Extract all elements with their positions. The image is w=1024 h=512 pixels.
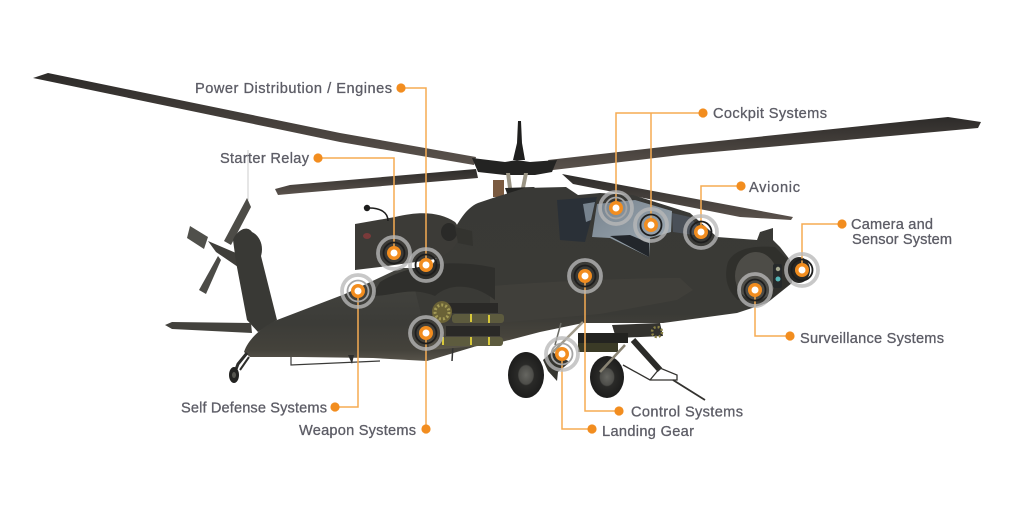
tail boom: [244, 268, 480, 361]
marker: power distribution: [410, 249, 442, 281]
nose recess: [726, 247, 790, 302]
label: power distribution / engines: Power Distribution / Engines: [195, 81, 392, 97]
marker: cockpit 2: [635, 209, 667, 241]
right main landing gear: [590, 340, 705, 400]
horizontal stabiliser: [165, 322, 252, 333]
label: control systems: Control Systems: [631, 404, 743, 420]
side sponson: [490, 278, 693, 322]
label: avionic: Avionic: [749, 180, 800, 196]
engine intake: [441, 223, 473, 246]
label: starter relay: Starter Relay: [220, 151, 310, 167]
main fuselage: [415, 187, 792, 350]
engine nacelle: [355, 213, 459, 270]
leader lines: [318, 88, 842, 429]
label: cockpit systems: Cockpit Systems: [713, 106, 827, 122]
label: camera and sensor system: [837, 217, 952, 248]
marker: weapon: [410, 317, 442, 349]
marker: camera: [786, 254, 818, 286]
marker: self defense: [342, 275, 374, 307]
tail fin: [233, 229, 277, 332]
rocket pod and missiles: [432, 301, 504, 346]
label: surveillance systems: Surveillance Systems: [800, 331, 944, 347]
tail rotor: [187, 150, 251, 294]
nacelle antenna: [364, 205, 388, 221]
rotor hub and mast: [472, 121, 557, 197]
stub wing pod under fuselage: [578, 323, 663, 352]
label: camera and sensor system: Camera and: [851, 217, 933, 233]
label: self defense systems: Self Defense Systems: [181, 400, 327, 416]
marker: starter relay: [378, 237, 410, 269]
exhaust shrouds: [372, 263, 495, 300]
marker: avionic: [685, 216, 717, 248]
front sensor: [788, 257, 810, 283]
antenna under the boom: [291, 345, 453, 365]
marker: cockpit 1: [600, 192, 632, 224]
main rotor blades: [33, 73, 981, 220]
left main landing gear: [508, 322, 583, 398]
marker: landing gear: [546, 338, 578, 370]
nacelle warning light: [363, 233, 371, 239]
marker: control: [569, 260, 601, 292]
targeting sensor turret: [735, 252, 782, 300]
label: camera and sensor system: Sensor System: [852, 232, 952, 248]
label: weapon systems: Weapon Systems: [299, 423, 416, 439]
label: landing gear: Landing Gear: [602, 424, 694, 440]
marker: surveillance: [739, 274, 771, 306]
tail landing gear: [229, 353, 249, 383]
helicopter illustration: [33, 73, 981, 400]
cockpit windows: [557, 197, 707, 257]
hotspot markers: [342, 192, 818, 370]
